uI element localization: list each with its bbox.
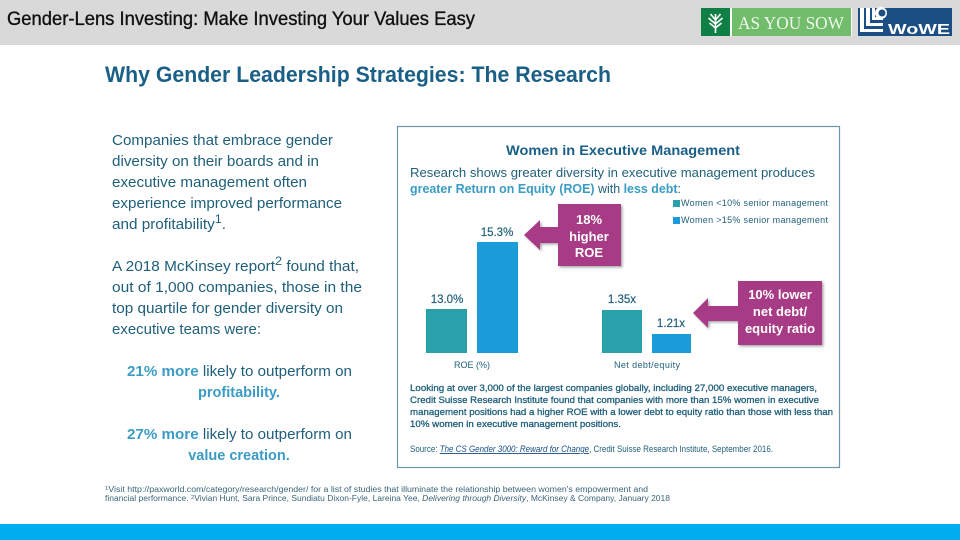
left text: McKinsey paragraph: found that, [282,259,359,275]
callout: 10% lower net debt/equity ratio: equity ratio [745,321,815,336]
left text: intro paragraph: executive management often [112,175,307,191]
left text: intro paragraph: and profitability [112,217,210,233]
stat: 27% more value creation: 27% more likely to outperform on [127,427,352,443]
left text: intro paragraph [112,133,342,233]
left text: McKinsey paragraph: A 2018 McKinsey report [112,259,266,275]
bar chart: net debt to equity [602,294,691,370]
legend: Women >15% senior management [681,215,828,225]
bar chart: ROE [426,227,518,370]
bar chart: ROE: 15.3% [481,227,513,239]
footer bar [0,524,960,540]
left text: McKinsey paragraph: top quartile for gender diversity on [112,301,343,317]
panel intro text: greater Return on Equity (ROE) with less debt: [410,181,681,196]
callout: 18% higher ROE [524,204,621,266]
footnotes: Delivering through Diversity , McKinsey & Company, January 2018 [422,494,662,503]
header title: Gender-Lens Investing: Make Investing Your Values Easy [7,9,475,30]
footnotes: Vivian Hunt, Sara Prince, Sundiatu Dixon-Fyle, Lareina Yee, [194,494,422,503]
callout: 18% higher ROE: higher [569,229,609,244]
logo: WOWE: WoWE [888,21,950,38]
panel body text [410,383,833,430]
footnotes: 2 [191,495,194,501]
stat: 21% more profitability: 21% more likely to outperform on [127,364,352,380]
logo: As You Sow: AS YOU SOW [738,13,844,33]
logo: As You Sow [701,8,852,36]
panel body text: management positions had a higher ROE with a lower debt to equity ratio than those with less than [410,407,833,418]
stat: 21% more profitability [127,364,352,401]
legend: Women <10% senior management [681,198,828,208]
stat: 27% more value creation: value creation. [188,448,290,464]
panel body text: Credit Suisse Research Institute found that companies with more than 15% women in executive [410,395,819,406]
bar chart: ROE: 13.0% [431,294,463,306]
callout: 10% lower net debt/equity ratio: net debt/ [753,304,807,319]
left text: intro paragraph: 1 [215,212,222,226]
header bar [0,0,960,45]
left text: intro paragraph: Companies that embrace gender [112,133,333,149]
left text: intro paragraph: . [222,217,226,233]
bar chart: net debt to equity: 1.21x [657,318,685,330]
footnotes: Visit http://paxworld.com/category/research/gender/ for a list of studies that illuminate the relationship between women's empowerment and [108,485,648,494]
panel intro text: Research shows greater diversity in executive management produces [410,165,815,180]
callout: 18% higher ROE: 18% [576,212,602,227]
left text: McKinsey paragraph [112,254,362,338]
stat: 21% more profitability: profitability. [198,385,280,401]
logo: WOWE [858,7,952,38]
source line: Source: The CS Gender 3000: Reward for Change, Credit Suisse Research Institute, September 2016. [410,444,773,454]
left text: McKinsey paragraph: 2 [275,254,282,268]
callout: 10% lower net debt/equity ratio: 10% lower [748,287,812,302]
footnotes: 1 [105,486,108,492]
footnotes [105,485,671,503]
legend [673,198,828,225]
bar chart: net debt to equity: 1.35x [608,294,636,306]
callout: 18% higher ROE: ROE [575,245,603,260]
left text: McKinsey paragraph: out of 1,000 companies, those in the [112,280,362,296]
left text: McKinsey paragraph: executive teams were: [112,322,261,338]
slide heading: Why Gender Leadership Strategies: The Research [105,62,611,87]
callout: 10% lower net debt/equity ratio [693,281,822,345]
footnotes: financial performance. [105,494,184,503]
panel: women in executive management [398,126,840,468]
panel body text: 10% women in executive management positions. [410,419,621,430]
left text: intro paragraph: diversity on their boards and in [112,154,319,170]
bar chart: net debt to equity: Net debt/equity [614,360,680,370]
stat: 27% more value creation [127,427,352,464]
panel body text: Looking at over 3,000 of the largest companies globally, including 27,000 executive managers, [410,383,817,394]
left text: intro paragraph: experience improved performance [112,196,342,212]
bar chart: ROE: ROE (%) [454,360,490,370]
panel heading: Women in Executive Management [506,142,740,158]
icon: tree [708,14,722,33]
panel intro text [410,165,815,196]
